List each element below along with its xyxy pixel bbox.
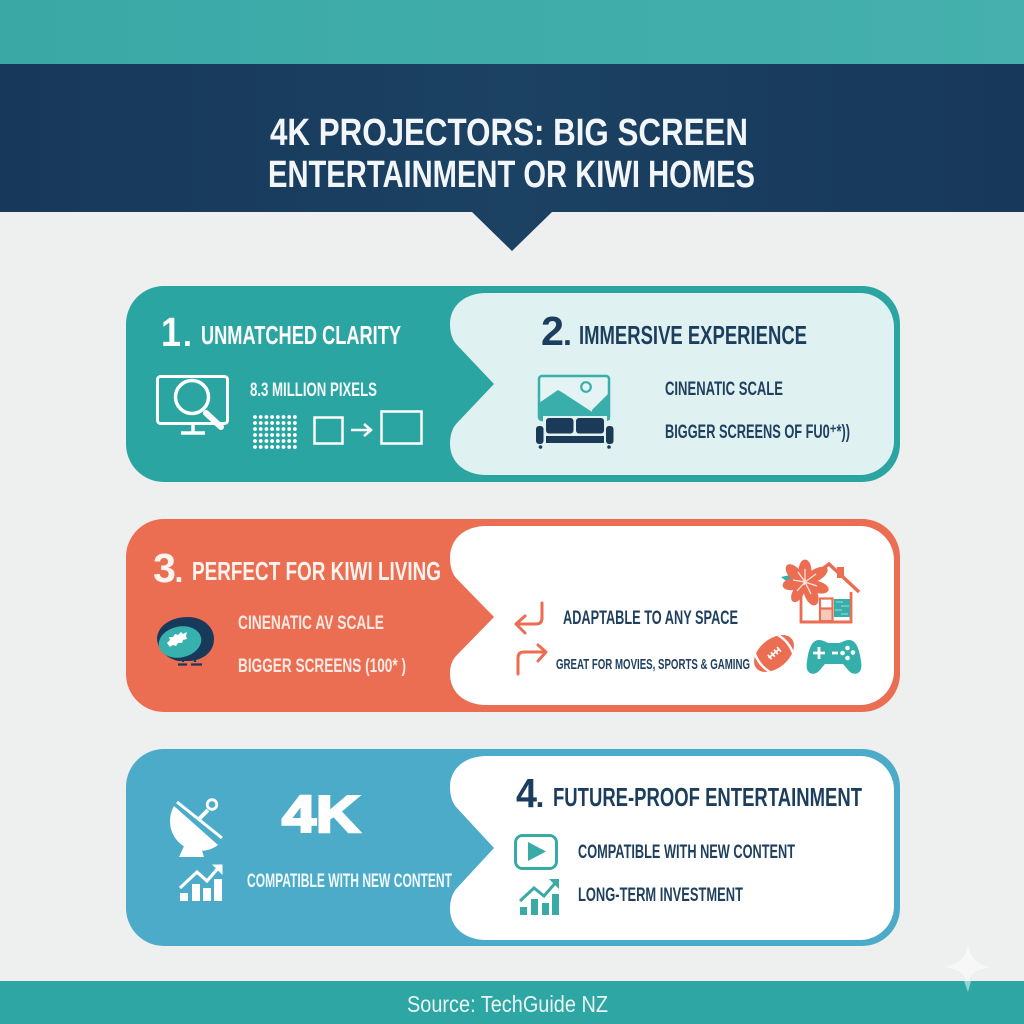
text: compatible: COMPATIBLE WITH NEW CONTENT xyxy=(247,871,452,892)
text: kiwi living points: BIGGER SCREENS (100* ) xyxy=(238,656,406,677)
heading 1 xyxy=(161,309,401,355)
heading 4: FUTURE-PROOF ENTERTAINMENT xyxy=(553,782,862,812)
text: kiwi living points xyxy=(238,613,406,677)
text: immersive points xyxy=(665,379,850,443)
text: immersive points: CINENATIC SCALE xyxy=(665,379,783,400)
panel 4: future-proof xyxy=(126,749,900,946)
icon: growth chart white xyxy=(180,864,222,901)
icon: play button xyxy=(516,836,556,868)
icon: pixel dots xyxy=(253,415,297,449)
text: immersive points: BIGGER SCREENS OF FU0⁺*)) xyxy=(665,422,850,443)
heading 3: 3 xyxy=(153,545,176,591)
title: ENTERTAINMENT OR KIWI HOMES xyxy=(268,154,755,196)
header banner xyxy=(0,64,1024,251)
title: 4K PROJECTORS: BIG SCREEN xyxy=(270,112,748,154)
heading 2 xyxy=(541,308,807,354)
heading 1: . xyxy=(183,317,192,353)
panel 3: Kiwi living xyxy=(126,519,900,712)
icon: growth chart teal xyxy=(520,879,559,915)
panel 1 and 2: clarity and immersive xyxy=(126,286,900,482)
heading 1: UNMATCHED CLARITY xyxy=(201,320,401,350)
icon: monitor with magnifier xyxy=(158,376,228,433)
heading 4 xyxy=(516,770,862,816)
heading 2: IMMERSIVE EXPERIENCE xyxy=(579,320,807,350)
text: long-term: LONG-TERM INVESTMENT xyxy=(578,885,743,906)
heading 2: 2 xyxy=(541,308,564,354)
icon: game controller xyxy=(807,640,861,674)
top band xyxy=(0,0,1024,64)
icon: turn arrow xyxy=(518,645,546,674)
icon: rugby ball xyxy=(747,628,801,679)
text: great for: GREAT FOR MOVIES, SPORTS & GAMING xyxy=(556,656,750,673)
heading 4: . xyxy=(536,778,544,814)
icon: return arrow xyxy=(516,603,542,633)
heading 1: 1 xyxy=(161,309,181,355)
text: kiwi living points: CINENATIC AV SCALE xyxy=(238,613,384,634)
icon: kiwi football bird xyxy=(156,617,214,664)
4K label: 4K xyxy=(282,786,361,844)
source text: Source: TechGuide NZ xyxy=(407,991,608,1017)
heading 3: . xyxy=(174,553,183,589)
icon: small to large screen xyxy=(314,412,422,444)
text: pixels: 8.3 MILLION PIXELS xyxy=(250,380,377,401)
heading 4: 4 xyxy=(516,770,537,816)
icon: house with flower xyxy=(781,560,859,622)
heading 3 xyxy=(153,545,441,591)
footer xyxy=(0,981,1024,1024)
text: compatible right: COMPATIBLE WITH NEW CONTENT xyxy=(578,842,795,863)
icon: sparkle xyxy=(944,944,991,992)
heading 2: . xyxy=(563,316,572,352)
icon: couch and landscape screen xyxy=(536,376,614,449)
heading 3: PERFECT FOR KIWI LIVING xyxy=(192,556,441,586)
title xyxy=(268,112,755,196)
text: adaptable: ADAPTABLE TO ANY SPACE xyxy=(563,608,738,629)
icon: satellite dish xyxy=(170,800,222,857)
